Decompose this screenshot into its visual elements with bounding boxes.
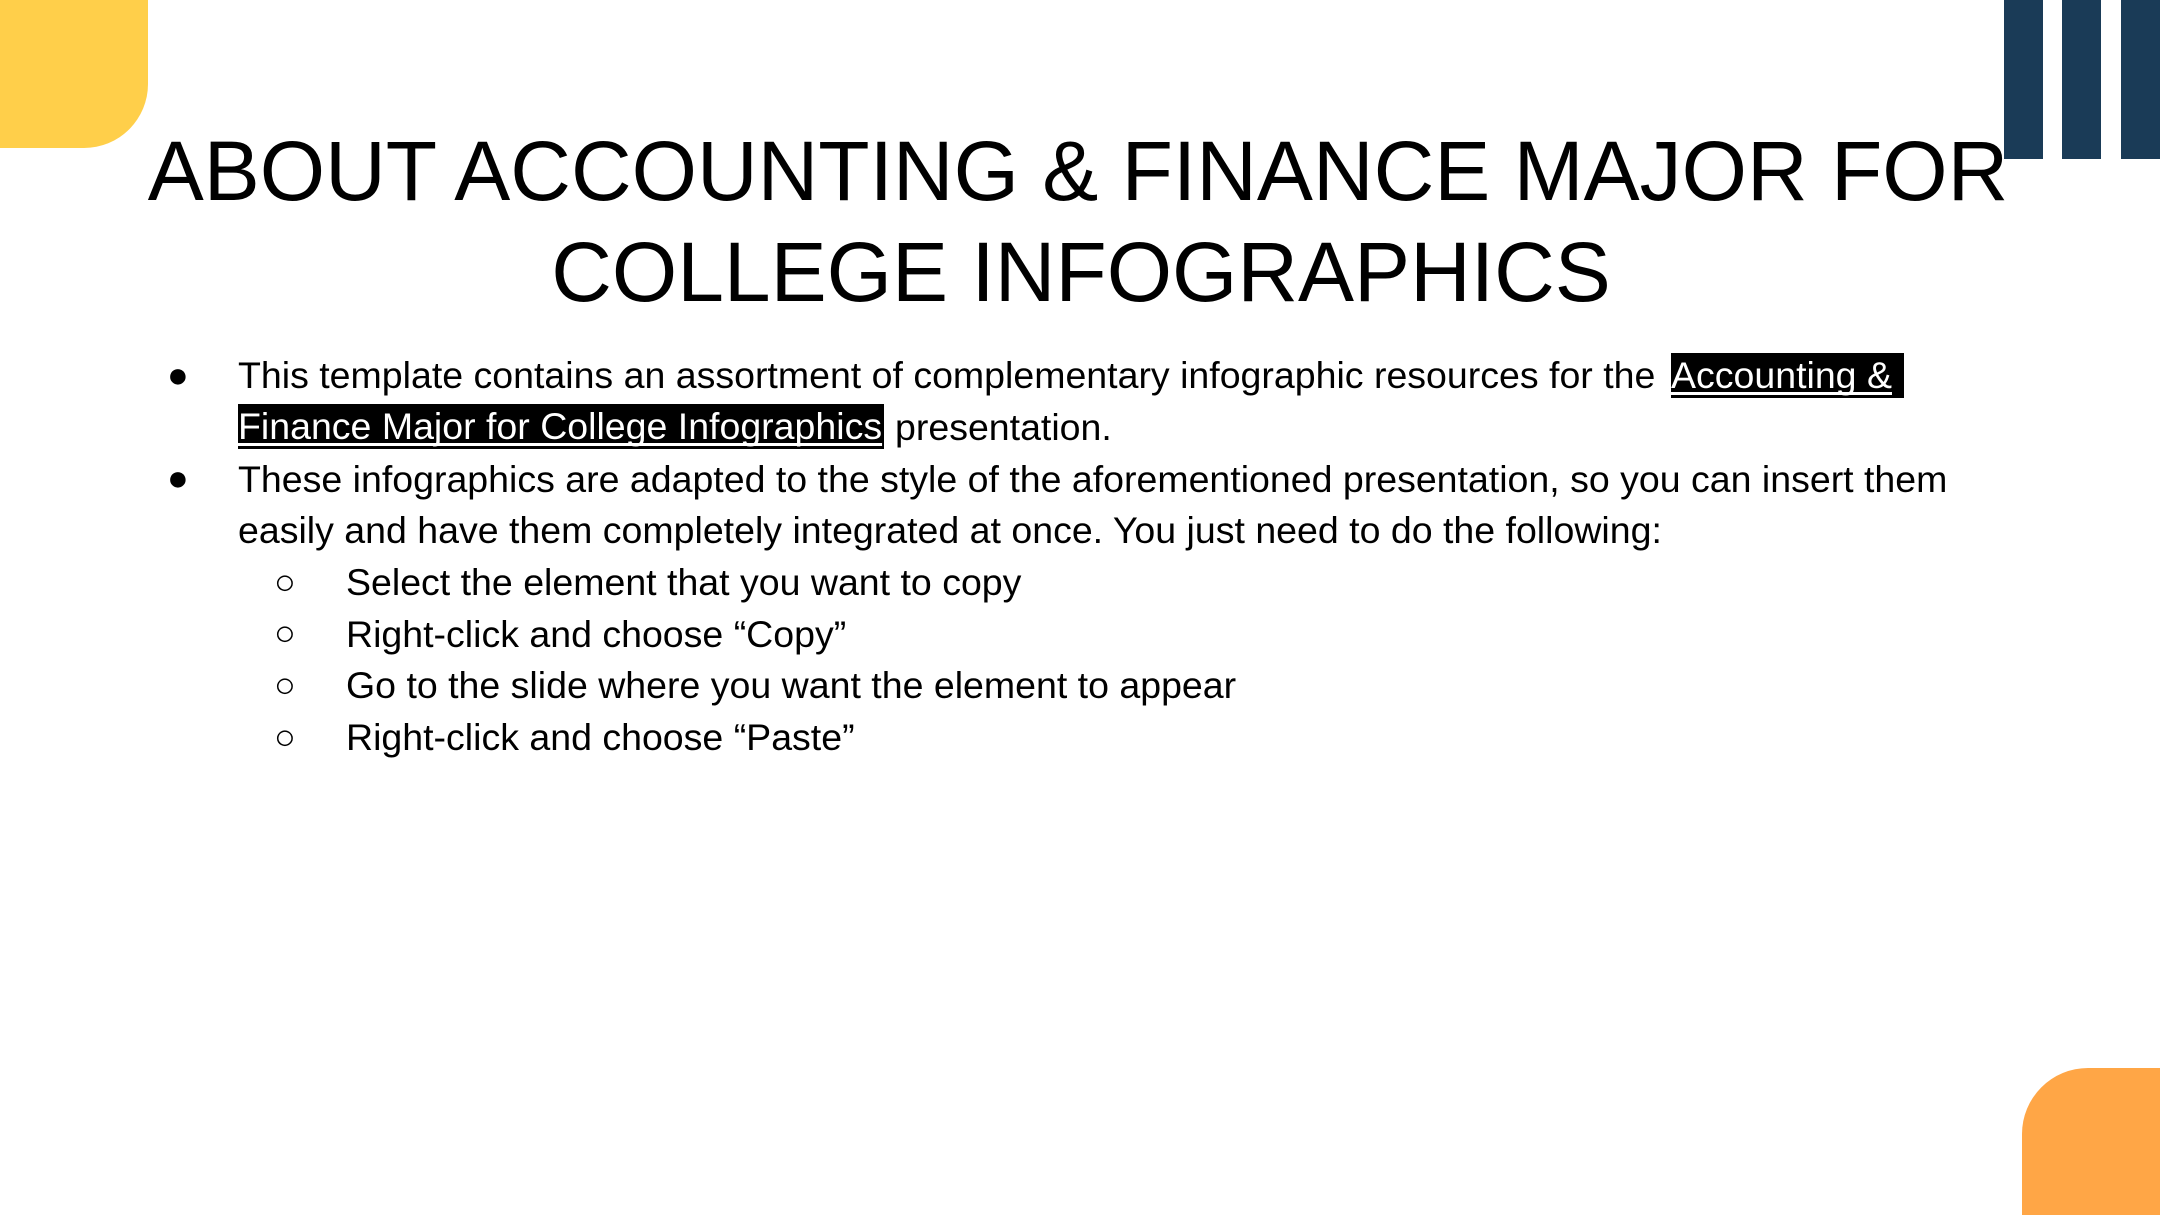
sub-bullet 2 text: Right-click and choose “Copy”: [346, 613, 846, 655]
bullet list: template description: [167, 353, 1947, 758]
title: [148, 124, 2008, 319]
decoration: yellow corner shape: [0, 0, 148, 148]
link highlight: line 1: Accounting &: [1671, 354, 1892, 396]
sub-bullet 1 text: Select the element that you want to copy: [346, 561, 1021, 603]
sub-bullet 3 marker: ○: [274, 664, 296, 705]
bullet 1 text: This template contains an assortment of complementary infographic resources for the: [238, 354, 1655, 396]
sub-bullet 4 marker: ○: [274, 716, 296, 757]
bullet 1 continuation: presentation.: [895, 406, 1112, 448]
decoration: navy bar 1: [2004, 0, 2043, 159]
sub-bullet 3 text: Go to the slide where you want the element to appear: [346, 664, 1236, 706]
decoration: orange corner shape: [2022, 1068, 2160, 1215]
bullet 2 text line 1: These infographics are adapted to the style of the aforementioned presentation, so you can insert them: [238, 458, 1947, 500]
sub-bullet 1 marker: ○: [274, 561, 296, 602]
bullet 1 marker: ●: [167, 354, 189, 395]
bullet 2 text line 2: easily and have them completely integrated at once. You just need to do the following:: [238, 509, 1662, 551]
sub-bullet 4 text: Right-click and choose “Paste”: [346, 716, 855, 758]
link highlight: line 2: Finance Major for College Infographics: [238, 405, 882, 447]
decoration: navy bar 3: [2121, 0, 2160, 159]
decoration: navy bar 2: [2062, 0, 2101, 159]
title: COLLEGE INFOGRAPHICS: [551, 225, 1611, 319]
sub-bullet 2 marker: ○: [274, 612, 296, 653]
bullet 2 marker: ●: [167, 457, 189, 498]
title: ABOUT ACCOUNTING & FINANCE MAJOR FOR: [148, 124, 2008, 218]
